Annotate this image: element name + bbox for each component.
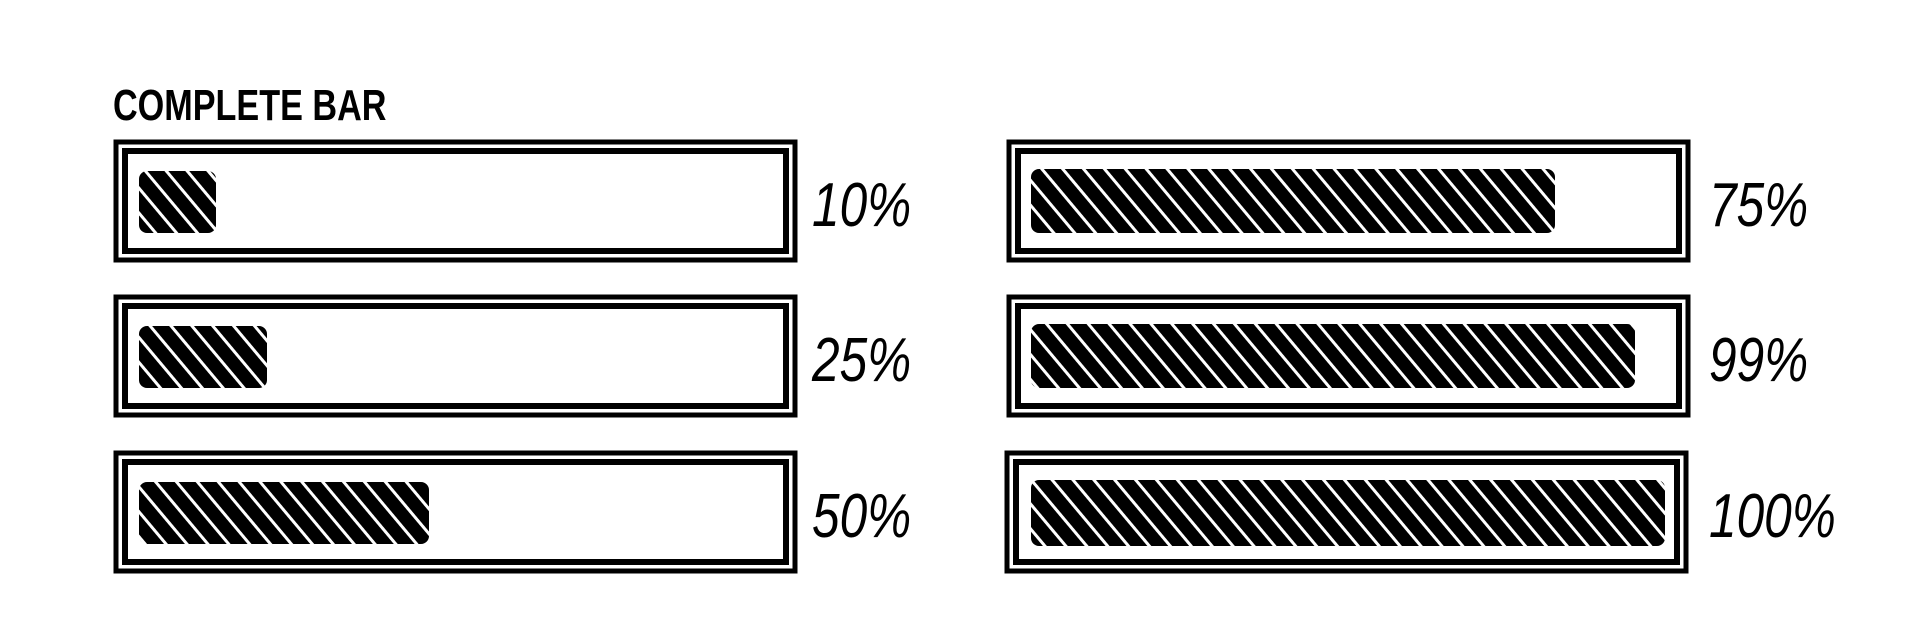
bar: 100%: 100%	[1709, 481, 1836, 550]
bar: 25%: 25%	[811, 325, 911, 394]
bar: 100%	[1007, 453, 1836, 571]
bar: 10%	[116, 142, 911, 260]
bar: 50%	[116, 453, 911, 571]
bar: 75%	[1009, 142, 1808, 260]
bar: 25%	[116, 297, 911, 415]
bar: 99%	[1009, 297, 1808, 415]
bar: 10%: 10%	[812, 170, 911, 239]
bar: 75%: 75%	[1709, 170, 1808, 239]
bar: 50%: 50%	[812, 481, 911, 550]
bar: 99%: 99%	[1709, 325, 1808, 394]
title: COMPLETE BAR	[113, 81, 386, 130]
